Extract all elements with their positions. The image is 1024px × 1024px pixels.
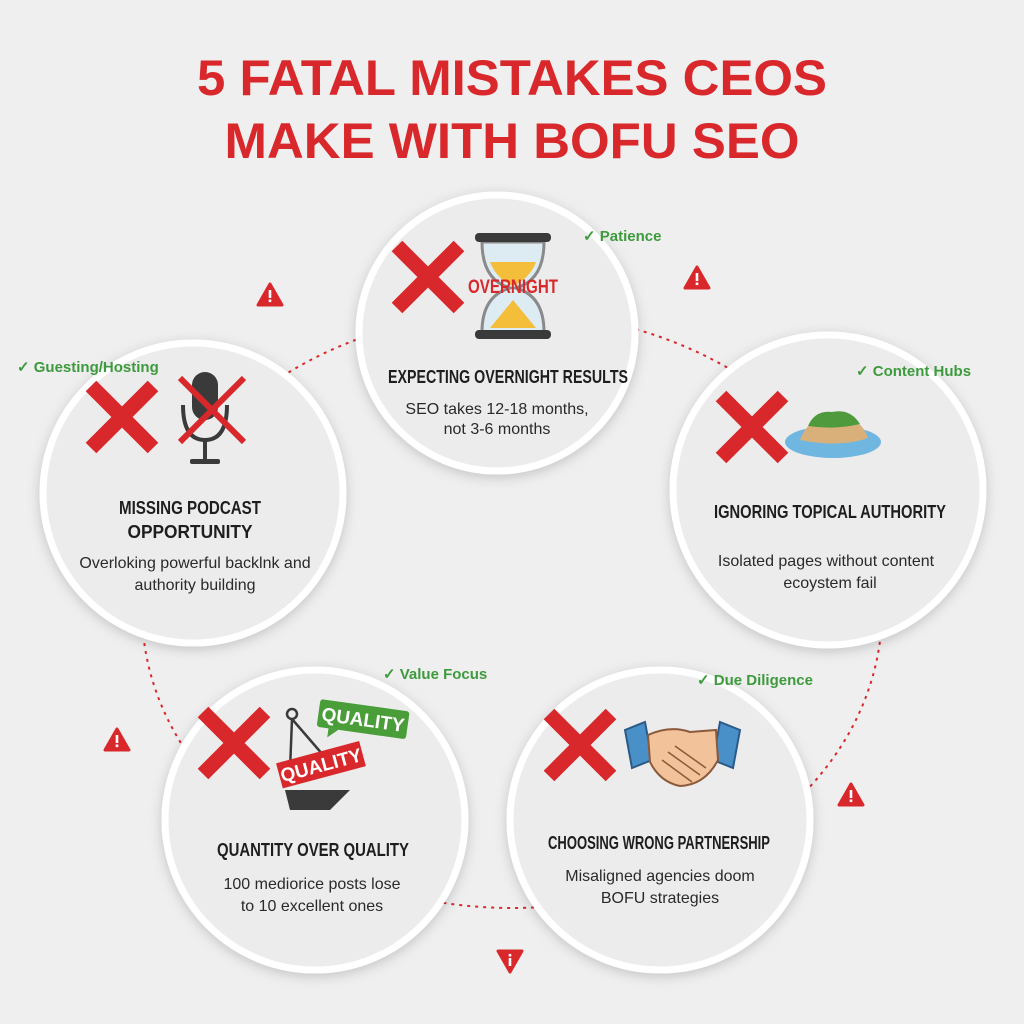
icon: handshake bbox=[625, 722, 740, 786]
body text bbox=[79, 555, 311, 594]
check: value focus: ✓ Value Focus bbox=[383, 666, 487, 683]
body text: ecoystem fail bbox=[783, 575, 877, 592]
heading: OPPORTUNITY bbox=[128, 522, 252, 542]
body text bbox=[405, 401, 589, 438]
body text: to 10 excellent ones bbox=[241, 898, 383, 915]
heading: CHOOSING WRONG PARTNERSHIP bbox=[548, 833, 770, 853]
heading: EXPECTING OVERNIGHT RESULTS bbox=[388, 367, 628, 387]
heading: QUANTITY OVER QUALITY bbox=[217, 840, 409, 860]
title bbox=[197, 50, 827, 169]
icon: microphone crossed bbox=[180, 372, 244, 464]
body text: authority building bbox=[135, 577, 255, 594]
body text: 100 mediorice posts lose bbox=[224, 876, 401, 893]
icon: scale with quality labels bbox=[276, 699, 410, 810]
body text bbox=[224, 876, 401, 915]
heading: MISSING PODCAST bbox=[119, 498, 261, 518]
dashed connector ring bbox=[142, 312, 882, 908]
panel: podcast bbox=[43, 343, 343, 643]
heading bbox=[119, 498, 261, 542]
body text: BOFU strategies bbox=[601, 890, 719, 907]
icon: red x bbox=[203, 712, 265, 774]
icon: scale with quality labels: QUALITY bbox=[320, 704, 406, 737]
panel: quantity over quality bbox=[165, 670, 465, 970]
panel: wrong partnership bbox=[510, 670, 810, 970]
title: MAKE WITH BOFU SEO bbox=[224, 113, 799, 169]
icon: red x bbox=[91, 386, 153, 448]
body text: SEO takes 12-18 months, bbox=[405, 401, 589, 418]
icon: hourglass: OVERNIGHT bbox=[468, 277, 558, 298]
check: patience: ✓ Patience bbox=[583, 228, 661, 245]
body text: Isolated pages without content bbox=[718, 553, 935, 570]
icon: red x bbox=[721, 396, 783, 458]
check: content hubs: ✓ Content Hubs bbox=[856, 363, 971, 380]
body text bbox=[565, 868, 755, 907]
title: 5 FATAL MISTAKES CEOS bbox=[197, 50, 827, 106]
panel: topical authority bbox=[673, 335, 983, 645]
body text: not 3-6 months bbox=[444, 421, 550, 438]
warning icons bbox=[105, 267, 863, 972]
icon: hourglass bbox=[468, 233, 558, 339]
heading: IGNORING TOPICAL AUTHORITY bbox=[714, 502, 946, 522]
body text bbox=[718, 553, 935, 592]
icon: red x bbox=[549, 714, 611, 776]
check: due diligence: ✓ Due Diligence bbox=[697, 672, 813, 689]
body text: Misaligned agencies doom bbox=[565, 868, 755, 885]
icon: red x bbox=[397, 246, 459, 308]
panel: overnight results bbox=[359, 195, 635, 471]
check: guesting: ✓ Guesting/Hosting bbox=[17, 359, 159, 376]
icon: scale with quality labels: QUALITY bbox=[278, 745, 365, 787]
icon: island bbox=[785, 411, 881, 458]
body text: Overloking powerful backlnk and bbox=[79, 555, 311, 572]
